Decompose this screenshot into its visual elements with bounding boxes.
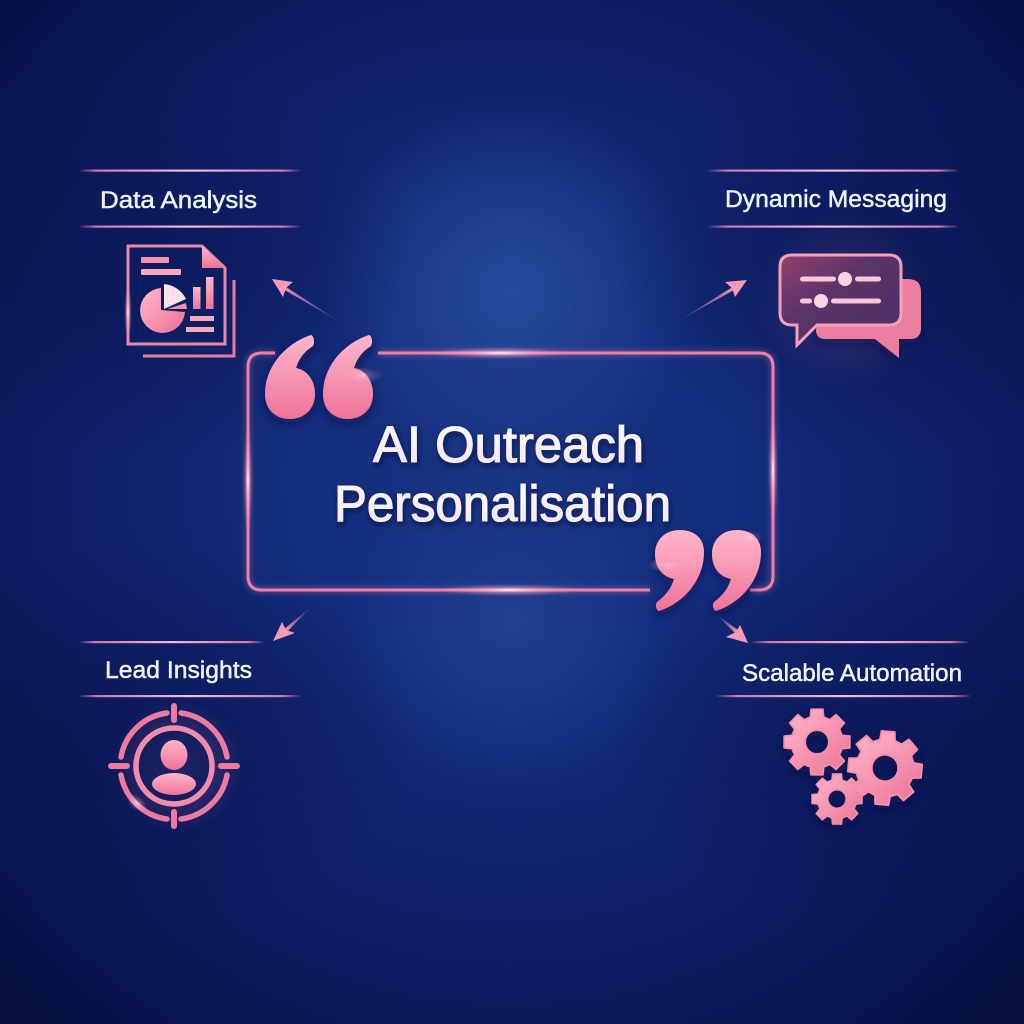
panel: scalable automation xyxy=(717,641,970,824)
title xyxy=(334,416,671,532)
arrow: to lead insights xyxy=(273,608,310,641)
icon: opening quote marks xyxy=(265,335,384,419)
title: Personalisation xyxy=(334,475,671,532)
label: dynamic messaging: Dynamic Messaging xyxy=(725,186,947,213)
title: AI Outreach xyxy=(373,416,644,473)
panel: dynamic messaging xyxy=(708,170,958,390)
panel: data analysis xyxy=(80,170,300,356)
icon: three gears xyxy=(784,709,925,824)
icon: target with person xyxy=(108,700,244,832)
panel: lead insights xyxy=(80,641,300,832)
label: scalable automation: Scalable Automation xyxy=(742,660,962,687)
label: data analysis: Data Analysis xyxy=(100,187,257,214)
icon: report document with charts xyxy=(124,246,234,356)
arrow: to scalable automation xyxy=(717,615,748,643)
panel: central quote frame xyxy=(243,347,778,596)
icon: chat bubbles with sliders xyxy=(755,210,935,390)
icon: closing quote marks xyxy=(648,530,762,611)
arrow: to data analysis xyxy=(272,279,340,322)
label: lead insights: Lead Insights xyxy=(105,657,252,684)
arrow: to dynamic messaging xyxy=(680,280,747,320)
